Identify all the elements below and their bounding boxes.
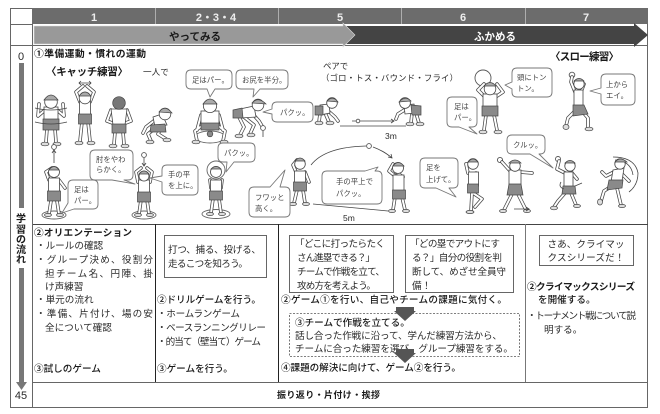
figure: catching at chest [202, 161, 230, 218]
figure: bent catching with ball [233, 99, 266, 138]
dashed box: team strategy: チームに合った練習を選び、グループ練習をする。 [295, 343, 513, 355]
cell: lessons 2-4 drill game: ・ベースランニングリレー [157, 322, 266, 334]
cell: lesson 7 climax series: を開催する。 [538, 294, 596, 306]
figure: pair partner left rolling [315, 98, 338, 125]
header row: lesson numbers: 7 [583, 12, 589, 24]
goal box: climax [540, 236, 634, 266]
figure: follow-through [598, 157, 638, 208]
goal box: where to hit: さん進塁できる？」 [297, 252, 375, 264]
phase arrow: ふかめる: ふかめる [474, 31, 516, 43]
callout: softly high: 高く。 [255, 204, 277, 213]
callout: feet as bar [186, 70, 232, 97]
cell: lessons 2-4 drill game [157, 294, 266, 375]
goal box: which base: 断して、めざせ全員守 [412, 266, 506, 278]
callout: raise foot [420, 158, 458, 197]
callout: tap on head [505, 68, 552, 97]
goal box: which base: る？」自分の役割を判 [412, 252, 502, 264]
dashed box: team strategy [290, 314, 520, 356]
cell: lesson 1 orientation: ・準備、片付け、場の安 [36, 308, 153, 320]
callout: from above [590, 74, 635, 105]
time axis: learning flow [15, 51, 27, 402]
figure: pair partner right catching [396, 98, 424, 126]
callout: half hip: お尻を半分。 [242, 76, 286, 84]
figure: arms overhead [75, 81, 95, 145]
time axis: learning flow: 0 [18, 51, 24, 63]
slow practice heading: 〈スロー練習〉 [550, 50, 619, 63]
solo label: 一人で [143, 67, 169, 77]
cell: lesson 1 orientation: 全について確認 [45, 322, 112, 334]
closing row: 振り返り・片付け・挨拶 [277, 389, 380, 400]
cell: lesson 7 climax series [527, 281, 636, 336]
goal box: where to hit: チームで作戦を立て、 [297, 266, 385, 278]
callout: soft elbows: 肘をやわ [96, 155, 126, 164]
phase arrow: やってみる: やってみる [169, 31, 221, 43]
callout: feet bar two: パー。 [74, 196, 96, 205]
callout: from above: エイ。 [606, 91, 628, 100]
cell: lessons 2-4 drill game: ②ドリルゲームを行う。 [157, 294, 261, 306]
cell: lessons 2-4 drill game: ・ホームランゲーム [157, 308, 240, 320]
figure: crouching front with ball [192, 99, 228, 144]
callout: feet bar three: パー。 [454, 113, 476, 122]
header row: lesson numbers: 1 [91, 12, 97, 24]
callout: pakku two: パクッ。 [224, 148, 254, 158]
figure: crouching side view [143, 108, 172, 144]
arrow: down to strategy [394, 307, 416, 321]
rolling ball and 3m dimension [340, 119, 406, 141]
cell: lesson 7 climax series: ②クライマックスシリーズ [527, 281, 635, 293]
phase arrow: ふかめる [345, 23, 648, 47]
callout: from above: 上から [606, 80, 628, 89]
time axis: learning flow: 習 [16, 224, 26, 236]
header row: lesson numbers: 2・3・4 [196, 12, 237, 24]
callout: feet as bar: 足はパー。 [192, 76, 229, 84]
callout: palm up [150, 165, 198, 195]
callout: palm-top catch: パクッ。 [336, 189, 366, 198]
callout: pakku two [218, 143, 255, 172]
callout: feet bar two: 足は [74, 185, 89, 194]
goal box: where to hit: 攻め方を考えよう。 [297, 280, 376, 292]
callout: palm-top catch [322, 167, 382, 204]
callout: pakku [263, 102, 313, 122]
cell: lesson 7 climax series: 明する。 [544, 325, 582, 336]
cell: lesson 1 orientation: ③試しのゲーム [34, 363, 101, 375]
catch practice heading: 〈キャッチ練習〉 [46, 65, 128, 78]
callout: softly high [249, 170, 290, 217]
callout: palm-top catch: 手の平上で [336, 177, 373, 186]
cell: lesson 1 orientation: け声練習 [45, 281, 83, 293]
callout: tap on head: トン。 [517, 84, 539, 93]
time axis: learning flow: 流 [16, 243, 26, 256]
callout: spin: クルッ。 [513, 140, 542, 150]
rolling ball and 3m dimension: 3m [385, 131, 397, 141]
callout: feet bar three [447, 97, 477, 134]
step: game 1: ②ゲーム①を行い、自己やチームの課題に気付く。 [281, 294, 507, 306]
callout: feet bar three: 足は [454, 102, 469, 111]
figure: ball on head [475, 70, 503, 134]
figure: overhead throw, slow [563, 72, 593, 131]
cell: lessons 2-4 drill game: ③ゲームを行う。 [157, 363, 233, 375]
cell: lesson 1 orientation: ②オリエンテーション [34, 228, 132, 239]
callout: soft elbows: らかく。 [96, 165, 126, 174]
goal box: which base: 「どの塁でアウトにす [410, 239, 500, 250]
cell: lesson 1 orientation: ・グループ決め、役割分 [36, 254, 153, 266]
goal box: which base: 備！ [412, 280, 431, 292]
pair label: ペアで [323, 61, 348, 71]
warm-up heading: ①準備運動・慣れの運動 [34, 47, 146, 60]
callout: palm up: を上に。 [168, 181, 198, 190]
goal box: lessons 2-4 [164, 236, 266, 278]
goal box: lessons 2-4: 走るこつを知ろう。 [168, 258, 248, 270]
time axis: learning flow: 学 [16, 212, 26, 225]
time axis: learning flow: 45 [15, 390, 27, 402]
figure: back view standing [107, 97, 131, 148]
header row: lesson numbers: 6 [460, 12, 466, 24]
figure: catching above head [132, 153, 156, 219]
header row: lesson numbers [32, 8, 648, 24]
dashed box: team strategy: ③チームで作戦を立てる。 [295, 317, 410, 329]
callout: feet bar two [62, 180, 98, 213]
figure: lifting leg [466, 159, 482, 214]
goal box: where to hit: 「どこに打ったらたく [295, 238, 385, 250]
cell: lesson 7 climax series: ・トーナメント戦について説 [527, 310, 636, 322]
cell: lesson 1 orientation: 担チーム名、円陣、掛 [45, 268, 153, 280]
cell: lesson 1 orientation: ・ルールの確認 [36, 240, 104, 252]
callout: raise foot: 上げて。 [426, 175, 455, 184]
time axis: learning flow: の [16, 235, 26, 246]
figure: wide stride throw [497, 157, 532, 213]
figure: partner catching in palm [388, 162, 410, 213]
callout: raise foot: 足を [426, 163, 441, 172]
time axis: learning flow: れ [16, 254, 26, 266]
callout: half hip [236, 70, 288, 97]
cell: lesson 1 orientation: ・単元の流れ [36, 294, 94, 306]
arrow: down to game 2 [394, 349, 416, 363]
figure: partner tossing high [290, 158, 310, 206]
header row: lesson numbers: 5 [337, 12, 343, 24]
dashed box: team strategy: 話し合った作戦に沿って、学んだ練習方法から、 [295, 330, 502, 342]
goal box: climax: さあ、クライマッ [548, 240, 624, 250]
figure: turning throw [550, 156, 582, 210]
callout: palm up: 手の平 [168, 170, 190, 179]
goal box: where to hit [290, 236, 394, 292]
goal box: which base [406, 236, 514, 292]
step: game 2: ④課題の解決に向けて、ゲーム②を行う。 [281, 362, 461, 374]
toss arc and 5m dimension [311, 144, 392, 223]
goal box: climax: クスシリーズだ！ [548, 252, 624, 264]
callout: pakku: パクッ。 [280, 108, 310, 117]
cell: lesson 1 orientation [34, 228, 153, 375]
phase arrow: やってみる [34, 23, 355, 47]
callout: tap on head: 頭にトン [517, 73, 547, 82]
figure: arms bent standing [35, 95, 67, 146]
callout: soft elbows [90, 150, 135, 184]
toss arc and 5m dimension: 5m [343, 213, 355, 223]
callout: spin [507, 135, 553, 168]
pair label: （ゴロ・トス・バウンド・フライ） [321, 73, 458, 83]
goal box: lessons 2-4: 打つ、捕る、投げる、 [168, 244, 261, 256]
figure: throw ball up [42, 145, 66, 219]
callout: softly high: フワッと [255, 193, 285, 202]
cell: lessons 2-4 drill game: ・的当て（壁当て）ゲーム [157, 336, 261, 348]
